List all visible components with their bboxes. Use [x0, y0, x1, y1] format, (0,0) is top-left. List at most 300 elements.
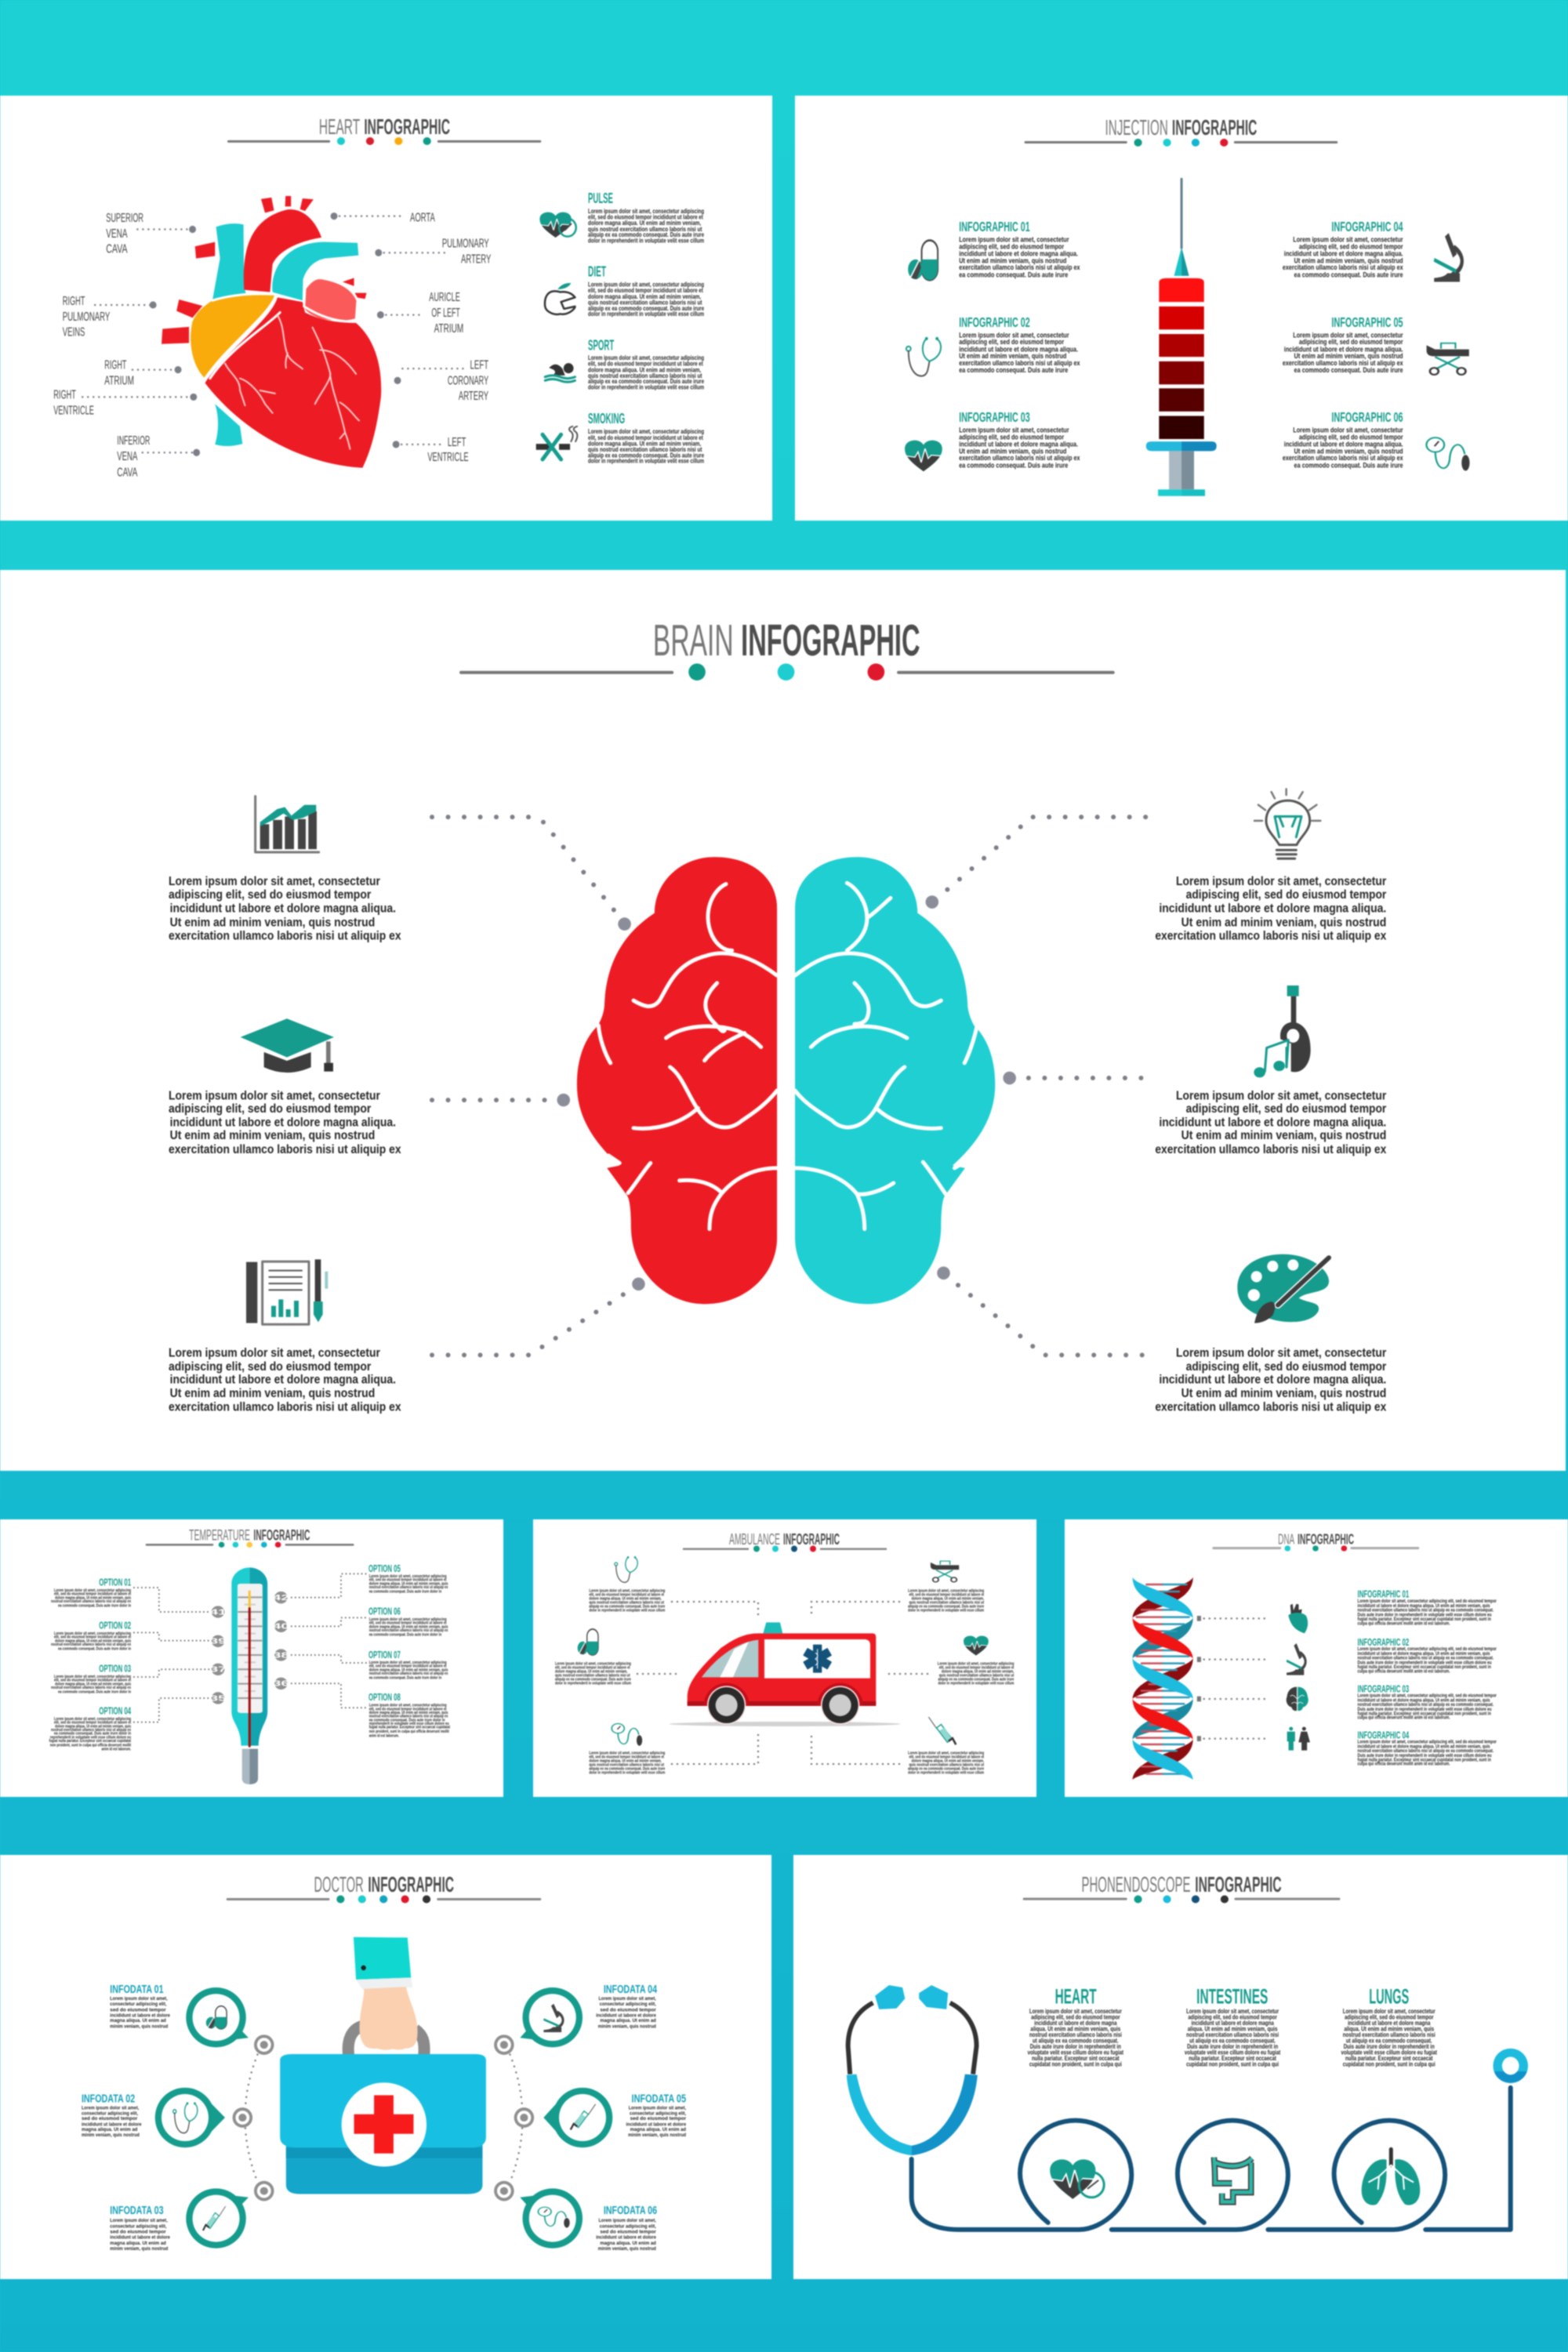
text: option 04	[49, 1706, 131, 1751]
text: infodata 05: sed do eiusmod tempor	[630, 2116, 686, 2122]
panel: temperature infographic: elit, sed do eiusmod tempor incididunt ut labore et	[54, 1592, 131, 1596]
panel: phonendoscope infographic: nostrud exercitation ullamco laboris nisi	[1029, 2032, 1122, 2038]
panel: phonendoscope infographic: adipiscing elit, sed do eiusmod tempor	[1345, 2014, 1434, 2020]
panel: temperature infographic: nostrud exercitation ullamco laboris nisi ut aliquip ex	[369, 1714, 448, 1719]
panel: heart infographic: ARTERY	[459, 389, 488, 403]
heart anatomy labels and leader lines: ATRIUM	[434, 321, 463, 336]
text: dna 01: INFOGRAPHIC 01	[1358, 1589, 1409, 1600]
text: infodata 06	[596, 2203, 657, 2252]
heart anatomy labels and leader lines: AURICLE	[429, 289, 460, 304]
panel: heart infographic: quis nostrud exercitation ullamco laboris nisi ut	[588, 372, 702, 379]
text: chart block: incididunt ut labore et dolore magna aliqua.	[170, 901, 396, 915]
text: infodata 01: magna aliqua. Ut enim ad	[110, 2018, 166, 2024]
panel: phonendoscope infographic: Duis aute irure dolor in reprehenderit in	[1030, 2044, 1121, 2050]
panel: phonendoscope infographic: nostrud exercitation ullamco laboris nisi	[1343, 2032, 1436, 2038]
panel: heart infographic: elit, sed do eiusmod tempor incididunt ut labore et	[588, 288, 703, 294]
icon: pills	[908, 241, 938, 280]
panel: temperature infographic: Lorem ipsum dolor sit amet, consectetur adipiscing	[54, 1716, 131, 1721]
panel: ambulance infographic: dolore magna aliqua. Ut enim ad minim veniam,	[555, 1668, 627, 1674]
brain: right teal hemisphere	[795, 857, 995, 1304]
text: heart column: HEART	[1055, 1984, 1097, 2009]
text: clipboard block	[169, 1345, 401, 1414]
icon: no smoking	[536, 426, 577, 459]
icon: apple	[545, 283, 575, 314]
panel: ambulance infographic: Lorem ipsum dolor sit amet, consectetur adipiscing	[908, 1750, 984, 1755]
panel: doctor infographic: INFODATA 04	[604, 1982, 657, 1996]
panel: phonendoscope infographic: nulla pariatur. Excepteur sint occaecat	[1345, 2056, 1433, 2062]
icon: thermometer	[571, 2104, 596, 2129]
panel: temperature infographic: elit, sed do eiusmod tempor incididunt ut labore et	[54, 1720, 131, 1725]
text: infodata 03: magna aliqua. Ut enim ad	[110, 2240, 166, 2246]
list: pulse	[588, 191, 704, 245]
panel: doctor infographic: minim veniam, quis nostrud	[598, 2245, 656, 2252]
list: sport: SPORT	[588, 337, 614, 354]
text: option 06: OPTION 06	[368, 1606, 401, 1617]
block: infographic 06	[1283, 410, 1403, 470]
panel: temperature infographic: dolore magna aliqua. Ut enim ad minim veniam, quis	[55, 1682, 131, 1686]
icon: gauge	[612, 1723, 642, 1746]
temperature markers: 38	[273, 1651, 290, 1660]
panel: ambulance infographic: Lorem ipsum dolor sit amet, consectetur adipiscing	[555, 1661, 631, 1666]
text: infodata 01	[110, 1982, 170, 2029]
panel: phonendoscope infographic: voluptate velit esse cillum dolore eu fugiat	[1028, 2049, 1123, 2056]
title: injection infographic	[1025, 116, 1337, 147]
text: clipboard block: exercitation ullamco laboris nisi ut aliquip ex	[169, 1399, 401, 1414]
panel: doctor infographic: INFODATA 01	[110, 1982, 164, 1996]
heart anatomy labels and leader lines	[53, 210, 491, 479]
panel: temperature infographic: nostrud exercitation ullamco laboris nisi ut aliquip ex	[369, 1584, 448, 1589]
icon: microscope	[543, 2005, 563, 2032]
panel: injection infographic: Lorem ipsum dolor sit amet, consectetur	[1293, 331, 1403, 339]
list: pulse: PULSE	[588, 191, 613, 206]
text: guitar block: incididunt ut labore et dolore magna aliqua.	[1159, 1115, 1386, 1129]
panel: ambulance infographic: elit, sed do eiusmod tempor incididunt ut labore et	[909, 1754, 984, 1759]
panel: phonendoscope infographic: nulla pariatur. Excepteur sint occaecat	[1032, 2056, 1120, 2062]
panel: doctor infographic: minim veniam, quis nostrud	[628, 2132, 686, 2138]
panel: injection infographic	[795, 96, 1568, 521]
block: infographic 01: adipiscing elit, sed do eiusmod tempor	[959, 242, 1064, 251]
panel: ambulance infographic: dolor in reprehenderit in voluptate velit esse cillum	[589, 1769, 665, 1775]
title: brain infographic: INFOGRAPHIC	[741, 615, 920, 665]
text: clipboard block: incididunt ut labore et dolore magna aliqua.	[170, 1372, 396, 1386]
panel: temperature infographic: nostrud exercitation ullamco laboris nisi ut aliquip ex	[51, 1599, 131, 1603]
icon: stretcher	[931, 1561, 959, 1582]
text: cap block: Lorem ipsum dolor sit amet, consectetur	[169, 1088, 380, 1102]
panel: ambulance infographic: elit, sed do eiusmod tempor incididunt ut labore et	[909, 1592, 984, 1597]
icon: clipboard report	[246, 1259, 328, 1324]
panel: heart infographic: quis nostrud exercitation ullamco laboris nisi ut	[588, 447, 702, 453]
text: dolor in reprehenderit in voluptate velit esse cillum	[938, 1680, 1014, 1686]
panel: doctor infographic: minim veniam, quis nostrud	[110, 2245, 168, 2252]
panel: ambulance infographic: Lorem ipsum dolor sit amet, consectetur adipiscing	[589, 1750, 665, 1755]
text: heart column	[1028, 1984, 1123, 2068]
panel: temperature infographic: nostrud exercitation ullamco laboris nisi ut aliquip ex	[369, 1628, 448, 1632]
text: dna 04	[1358, 1730, 1497, 1766]
text: chart block: adipiscing elit, sed do eiusmod tempor	[169, 887, 371, 902]
panel: doctor infographic: incididunt ut labore et dolore	[626, 2122, 686, 2127]
panel: heart infographic: aliquip ex ea commodo consequat. Duis aute irure	[588, 305, 704, 312]
text: palette block: incididunt ut labore et dolore magna aliqua.	[1159, 1372, 1386, 1386]
panel: doctor infographic: consectetur adipiscing elit,	[630, 2111, 686, 2117]
panel: temperature infographic: dolore magna aliqua. Ut enim ad minim veniam, quis	[369, 1581, 448, 1586]
heart anatomy labels and leader lines: AORTA	[410, 210, 435, 224]
panel: doctor infographic: INFODATA 03	[110, 2203, 164, 2217]
panel: injection infographic: incididunt ut labore et dolore magna aliqua.	[959, 345, 1078, 353]
title: heart infographic	[228, 115, 540, 145]
panel: heart infographic: dolore magna aliqua. Ut enim ad minim veniam,	[588, 220, 701, 227]
panel: phonendoscope infographic: ut aliquip ex ea commodo consequat.	[1189, 2038, 1276, 2044]
title: dna infographic: INFOGRAPHIC	[1298, 1531, 1354, 1548]
title: dna infographic	[1214, 1531, 1418, 1552]
text: option 07	[368, 1650, 448, 1680]
text: elit, sed do eiusmod tempor incididunt ut labore et	[939, 1664, 1014, 1670]
panel: brain infographic	[0, 570, 1566, 1471]
icon: syringe	[203, 2206, 226, 2230]
panel: injection infographic: Ut enim ad minim veniam, quis nostrud	[1294, 351, 1403, 360]
panel: phonendoscope infographic: cupidatat non proident, sunt in culpa qui	[1029, 2061, 1122, 2068]
block: infographic 01: INFOGRAPHIC 01	[959, 220, 1030, 235]
panel: heart infographic: dolore magna aliqua. Ut enim ad minim veniam,	[588, 367, 701, 373]
panel: injection infographic: INFOGRAPHIC 05	[1331, 315, 1403, 330]
panel: temperature infographic: ea commodo consequat. Duis aute irure dolor in	[54, 1731, 131, 1736]
dotted connectors	[637, 1602, 931, 1764]
panel: temperature infographic: elit, sed do eiusmod tempor incididunt ut labore et	[369, 1577, 447, 1582]
panel: injection infographic: adipiscing elit, sed do eiusmod tempor	[1299, 433, 1403, 441]
panel: doctor infographic: minim veniam, quis nostrud	[598, 2024, 656, 2029]
text: guitar block: adipiscing elit, sed do eiusmod tempor	[1186, 1101, 1386, 1115]
panel: doctor infographic: INFODATA 05	[632, 2092, 686, 2105]
text: option 01	[51, 1577, 131, 1608]
panel: temperature infographic: OPTION 01	[99, 1577, 131, 1588]
heart anatomy labels and leader lines: VENTRICLE	[427, 449, 469, 464]
panel: phonendoscope infographic: nulla pariatur. Excepteur sint occaecat	[1189, 2056, 1276, 2062]
panel: temperature infographic: elit, sed do eiusmod tempor incididunt ut labore et	[369, 1621, 447, 1625]
title: temperature infographic: TEMPERATURE	[189, 1526, 250, 1544]
panel: temperature infographic: ea commodo consequat. Duis aute irure dolor in	[369, 1675, 441, 1680]
panel: dna infographic	[1065, 1519, 1568, 1797]
panel: ambulance infographic: dolore magna aliqua. Ut enim ad minim veniam,	[912, 1595, 984, 1601]
text: option 07: OPTION 07	[368, 1650, 401, 1661]
text: aliquip ex ea commodo consequat. Duis aute irure	[938, 1676, 1014, 1682]
icon: pulse heart with clock	[539, 212, 576, 238]
text: ambulance block bottom left	[589, 1750, 665, 1775]
text: infodata 05	[626, 2092, 686, 2138]
icon: graduation cap	[241, 1018, 334, 1073]
panel: temperature infographic: non proident, sunt in culpa qui officia deserunt mollit	[369, 1729, 449, 1733]
panel: doctor infographic: magna aliqua. Ut enim ad	[630, 2127, 686, 2132]
text: palette block: Ut enim ad minim veniam, quis nostrud	[1181, 1385, 1386, 1400]
text: palette block: adipiscing elit, sed do eiusmod tempor	[1186, 1359, 1386, 1374]
panel: temperature infographic: elit, sed do eiusmod tempor incididunt ut labore et	[54, 1678, 131, 1682]
text: Lorem ipsum dolor sit amet, consectetur adipiscing	[938, 1661, 1014, 1666]
panel: heart infographic: aliquip ex ea commodo consequat. Duis aute irure	[588, 379, 704, 385]
text: cap block: adipiscing elit, sed do eiusmod tempor	[169, 1101, 371, 1115]
icon: stethoscope	[173, 2102, 198, 2133]
text: cap block: exercitation ullamco laboris nisi ut aliquip ex	[169, 1142, 401, 1156]
temperature markers: 35	[209, 1694, 227, 1703]
text: guitar block	[1155, 1088, 1387, 1156]
panel: heart infographic: CORONARY	[448, 373, 488, 387]
panel: ambulance infographic: dolore magna aliqua. Ut enim ad minim veniam,	[589, 1758, 662, 1763]
text: guitar block: Lorem ipsum dolor sit amet, consectetur	[1176, 1088, 1386, 1102]
icon: pills	[206, 2006, 227, 2029]
panel: ambulance infographic: elit, sed do eiusmod tempor incididunt ut labore et	[589, 1592, 664, 1597]
text: ambulance block top right	[908, 1588, 984, 1613]
heart anatomy labels and leader lines: RIGHT	[53, 387, 76, 401]
panel: heart infographic: elit, sed do eiusmod tempor incididunt ut labore et	[588, 214, 703, 221]
title: doctor infographic	[227, 1872, 540, 1903]
panel: doctor infographic: magna aliqua. Ut enim ad	[600, 2240, 656, 2246]
block: infographic 01: Ut enim ad minim veniam, quis nostrud	[959, 256, 1066, 265]
block: infographic 02	[959, 315, 1080, 374]
temperature markers: 39	[209, 1637, 227, 1646]
icon: gauge	[538, 2207, 570, 2228]
text: chart block: exercitation ullamco laboris nisi ut aliquip ex	[169, 928, 401, 942]
connector nodes	[233, 2034, 534, 2201]
panel: heart infographic: Lorem ipsum dolor sit amet, consectetur adipiscing	[588, 281, 704, 289]
panel: heart infographic: quis nostrud exercitation ullamco laboris nisi ut	[588, 226, 702, 233]
panel: phonendoscope infographic: Duis aute irure dolor in reprehenderit in	[1344, 2044, 1435, 2050]
icon: lungs	[1362, 2149, 1420, 2205]
panel: ambulance infographic: quis nostrud exercitation ullamco laboris nisi ut	[939, 1672, 1014, 1678]
title: injection infographic: INFOGRAPHIC	[1172, 116, 1257, 140]
text: infodata 03: sed do eiusmod tempor	[110, 2229, 166, 2235]
text: bulb block: adipiscing elit, sed do eiusmod tempor	[1186, 887, 1386, 902]
panel: temperature infographic: ea commodo consequat. Duis aute irure dolor in	[369, 1589, 441, 1594]
text: bulb block: Ut enim ad minim veniam, quis nostrud	[1181, 915, 1386, 929]
text: chart block	[169, 874, 401, 942]
ambulance vehicle	[670, 1622, 900, 1726]
title: brain infographic	[461, 615, 1113, 681]
panel: phonendoscope infographic: Lorem ipsum dolor sit amet, consectetur	[1186, 2009, 1279, 2015]
text: option 05: OPTION 05	[368, 1563, 401, 1574]
panel: temperature infographic: dolore magna aliqua. Ut enim ad minim veniam, quis	[369, 1668, 448, 1672]
icon: swimmer	[545, 363, 575, 382]
dna double helix	[1133, 1577, 1193, 1780]
panel: phonendoscope infographic: voluptate velit esse cillum dolore eu fugiat	[1341, 2049, 1437, 2056]
panel: doctor infographic: incididunt ut labore et dolore	[596, 2234, 656, 2241]
heart anatomy labels and leader lines: SUPERIOR	[106, 210, 143, 225]
panel: temperature infographic: dolore magna aliqua. Ut enim ad minim veniam, quis	[55, 1639, 131, 1643]
panel: temperature infographic: dolore magna aliqua. Ut enim ad minim veniam, quis	[55, 1724, 131, 1729]
panel: temperature infographic: INFOGRAPHIC	[253, 1526, 310, 1544]
text: dolore magna aliqua. Ut enim ad minim veniam,	[942, 1668, 1014, 1674]
panel: doctor infographic: Lorem ipsum dolor sit amet,	[110, 2218, 168, 2223]
icon: bar chart	[256, 797, 319, 852]
text: palette block: exercitation ullamco laboris nisi ut aliquip ex	[1155, 1399, 1387, 1414]
block: infographic 02: Ut enim ad minim veniam, quis nostrud	[959, 351, 1066, 360]
panel: doctor infographic	[0, 1855, 771, 2279]
text: ambulance block middle right	[938, 1661, 1014, 1686]
panel: temperature infographic: dolore magna aliqua. Ut enim ad minim veniam, quis	[369, 1710, 448, 1715]
text: palette block	[1155, 1345, 1387, 1414]
panel: ambulance infographic: dolor in reprehenderit in voluptate velit esse cillum	[908, 1607, 984, 1613]
block: infographic 03: adipiscing elit, sed do eiusmod tempor	[959, 433, 1064, 441]
panel: ambulance infographic: aliquip ex ea commodo consequat. Duis aute irure	[589, 1766, 665, 1771]
block: infographic 04	[1283, 220, 1403, 279]
panel: injection infographic: exercitation ullamco laboris nisi ut aliquip ex	[959, 453, 1080, 462]
panel: heart infographic: dolor in reprehenderit in voluptate velit esse cillum	[588, 384, 704, 391]
syringe	[1146, 179, 1217, 496]
block: infographic 01: Lorem ipsum dolor sit amet, consectetur	[959, 235, 1069, 244]
panel: injection infographic: ea commodo consequat. Duis aute irure	[1294, 270, 1403, 279]
panel: temperature infographic: OPTION 03	[99, 1663, 131, 1675]
panel: doctor infographic: minim veniam, quis nostrud	[110, 2024, 168, 2029]
heart anatomy labels and leader lines: OF LEFT	[431, 306, 460, 320]
list: sport	[588, 337, 704, 391]
panel: doctor infographic: consectetur adipiscing elit,	[600, 2002, 656, 2007]
dotted connectors	[1197, 1616, 1266, 1741]
text: palette block: Lorem ipsum dolor sit amet, consectetur	[1176, 1345, 1386, 1359]
panel: heart infographic: PULMONARY	[442, 236, 489, 250]
text: cap block	[169, 1088, 401, 1156]
title: temperature infographic	[147, 1526, 353, 1548]
text: chart block: Ut enim ad minim veniam, quis nostrud	[170, 915, 375, 929]
panel: heart infographic: elit, sed do eiusmod tempor incididunt ut labore et	[588, 434, 703, 441]
icon: microscope	[1287, 1644, 1305, 1675]
medical case held by hand	[280, 1937, 486, 2194]
panel: injection infographic: incididunt ut labore et dolore magna aliqua.	[959, 440, 1078, 448]
block: infographic 01: ea commodo consequat. Duis aute irure	[959, 270, 1068, 279]
panel: phonendoscope infographic	[793, 1855, 1568, 2279]
panel: phonendoscope infographic: cupidatat non proident, sunt in culpa qui	[1186, 2061, 1279, 2068]
heart anatomy labels and leader lines: VENA	[117, 449, 138, 463]
panel: ambulance infographic: dolore magna aliqua. Ut enim ad minim veniam,	[589, 1595, 662, 1601]
panel: heart infographic: aliquip ex ea commodo consequat. Duis aute irure	[588, 452, 704, 459]
panel: injection infographic: exercitation ullamco laboris nisi ut aliquip ex	[959, 358, 1080, 367]
text: dna 04: INFOGRAPHIC 04	[1358, 1730, 1409, 1741]
icon: heart pulse	[964, 1635, 989, 1656]
panel: injection infographic: incididunt ut labore et dolore magna aliqua.	[959, 249, 1078, 258]
heart anatomy labels and leader lines: RIGHT	[104, 358, 126, 372]
block: infographic 03: Ut enim ad minim veniam, quis nostrud	[959, 447, 1066, 456]
icon: heart pulse	[905, 441, 942, 471]
heart anatomy labels and leader lines: CAVA	[106, 241, 128, 256]
icon: brain	[1287, 1687, 1308, 1711]
panel: ambulance infographic: quis nostrud exercitation ullamco laboris nisi ut	[589, 1762, 664, 1767]
panel: temperature infographic: elit, sed do eiusmod tempor incididunt ut labore et	[369, 1707, 447, 1711]
text: infodata 04	[596, 1982, 657, 2029]
panel: heart infographic: dolor in reprehenderit in voluptate velit esse cillum	[588, 311, 704, 318]
text: bulb block: incididunt ut labore et dolore magna aliqua.	[1159, 901, 1386, 915]
panel: temperature infographic: elit, sed do eiusmod tempor incididunt ut labore et	[54, 1635, 131, 1639]
block: infographic 02: adipiscing elit, sed do eiusmod tempor	[959, 337, 1064, 346]
list: diet: DIET	[588, 264, 606, 280]
panel: phonendoscope infographic: voluptate velit esse cillum dolore eu fugiat	[1185, 2049, 1280, 2056]
title: phonendoscope infographic	[1024, 1872, 1339, 1903]
icon: intestines	[1214, 2158, 1252, 2202]
title: brain infographic: BRAIN	[653, 615, 734, 665]
panel: doctor infographic: INFODATA 06	[604, 2203, 657, 2217]
panel: temperature infographic: dolore magna aliqua. Ut enim ad minim veniam, quis	[369, 1624, 448, 1629]
panel: ambulance infographic: aliquip ex ea commodo consequat. Duis aute irure	[555, 1676, 631, 1682]
panel: ambulance infographic: quis nostrud exercitation ullamco laboris nisi ut	[555, 1672, 630, 1678]
panel: temperature infographic	[0, 1519, 503, 1797]
panel: temperature infographic: non proident, sunt in culpa qui officia deserunt mollit	[50, 1743, 131, 1748]
thermometer	[231, 1567, 267, 1784]
panel: temperature infographic: Lorem ipsum dolor sit amet, consectetur adipiscing	[369, 1703, 447, 1708]
panel: phonendoscope infographic: nostrud exercitation ullamco laboris nisi	[1186, 2032, 1279, 2038]
temperature markers	[209, 1592, 290, 1704]
text: infodata 06: sed do eiusmod tempor	[600, 2229, 656, 2235]
icon: blood pressure gauge	[1426, 437, 1469, 470]
panel: doctor infographic: magna aliqua. Ut enim ad	[600, 2018, 656, 2024]
panel: heart infographic: dolore magna aliqua. Ut enim ad minim veniam,	[588, 441, 701, 448]
title: phonendoscope infographic: PHONENDOSCOPE	[1081, 1872, 1191, 1896]
panel: phonendoscope infographic: cupidatat non proident, sunt in culpa qui	[1343, 2061, 1436, 2068]
title: doctor infographic: INFOGRAPHIC	[368, 1872, 454, 1896]
panel: temperature infographic: reprehenderit in voluptate velit esse cillum dolore eu	[369, 1721, 449, 1726]
text: intestines column	[1185, 1984, 1280, 2068]
text: cap block: Ut enim ad minim veniam, quis nostrud	[170, 1127, 375, 1142]
panel: temperature infographic: Lorem ipsum dolor sit amet, consectetur adipiscing	[54, 1674, 131, 1679]
panel: phonendoscope infographic: aliqua. Ut enim ad minim veniam, quis	[1188, 2026, 1278, 2032]
icon: stethoscope	[615, 1556, 637, 1582]
icon: heart with gauge	[1050, 2159, 1104, 2199]
panel: temperature infographic: fugiat nulla pariatur. Excepteur sint occaecat cupidatat	[369, 1725, 450, 1730]
block: infographic 05	[1283, 315, 1403, 374]
panel: phonendoscope infographic: Lorem ipsum dolor sit amet, consectetur	[1343, 2009, 1436, 2015]
text: clipboard block: Lorem ipsum dolor sit amet, consectetur	[169, 1345, 380, 1359]
panel: heart infographic: quis nostrud exercitation ullamco laboris nisi ut	[588, 299, 702, 307]
title: ambulance infographic: INFOGRAPHIC	[783, 1531, 840, 1548]
panel: temperature infographic: Lorem ipsum dolor sit amet, consectetur adipiscing	[369, 1660, 447, 1664]
text: clipboard block: adipiscing elit, sed do eiusmod tempor	[169, 1359, 371, 1374]
dotted connectors	[432, 817, 1145, 1355]
text: ambulance block bottom right	[908, 1750, 984, 1775]
heart anatomy labels and leader lines: ATRIUM	[104, 373, 134, 387]
text: option 08: OPTION 08	[368, 1692, 401, 1703]
text: option 05	[368, 1563, 448, 1594]
text: infodata 02: sed do eiusmod tempor	[82, 2116, 138, 2122]
panel: ambulance infographic: Lorem ipsum dolor sit amet, consectetur adipiscing	[908, 1588, 984, 1593]
panel: phonendoscope infographic: adipiscing elit, sed do eiusmod tempor	[1031, 2014, 1120, 2020]
panel: injection infographic: Lorem ipsum dolor sit amet, consectetur	[1293, 235, 1403, 244]
panel: injection infographic: exercitation ullamco laboris nisi ut aliquip ex	[1283, 263, 1403, 271]
panel: phonendoscope infographic: ut aliquip ex ea commodo consequat.	[1346, 2038, 1432, 2044]
panel: temperature infographic: ea commodo consequat. Duis aute irure dolor in	[58, 1646, 131, 1651]
panel: temperature infographic: ea commodo consequat. Duis aute irure dolor in	[369, 1718, 445, 1722]
panel: ambulance infographic: dolor in reprehenderit in voluptate velit esse cillum	[589, 1607, 665, 1613]
panel: injection infographic: exercitation ullamco laboris nisi ut aliquip ex	[1283, 358, 1403, 367]
panel: phonendoscope infographic: aliqua. Ut enim ad minim veniam, quis	[1030, 2026, 1120, 2032]
icon: people	[1287, 1727, 1310, 1751]
panel: phonendoscope infographic: aliqua. Ut enim ad minim veniam, quis	[1344, 2026, 1434, 2032]
icon: paint palette	[1237, 1254, 1329, 1323]
block: infographic 02: ea commodo consequat. Duis aute irure	[959, 365, 1068, 374]
text: option 02	[51, 1620, 131, 1651]
panel: heart infographic: elit, sed do eiusmod tempor incididunt ut labore et	[588, 361, 703, 368]
teal bubbles	[155, 1987, 612, 2249]
panel: temperature infographic: dolore magna aliqua. Ut enim ad minim veniam, quis	[55, 1595, 131, 1600]
panel: ambulance infographic: aliquip ex ea commodo consequat. Duis aute irure	[908, 1766, 984, 1771]
temperature markers: 41	[209, 1608, 227, 1617]
panel: doctor infographic: incididunt ut labore et dolore	[110, 2013, 170, 2019]
text: infodata 02: magna aliqua. Ut enim ad	[82, 2127, 137, 2132]
temperature markers: 37	[209, 1665, 227, 1674]
panel: temperature infographic: nostrud exercitation ullamco laboris nisi ut aliquip ex	[51, 1685, 131, 1690]
block: infographic 03: ea commodo consequat. Duis aute irure	[959, 461, 1068, 470]
text: ambulance block middle left	[555, 1661, 631, 1686]
panel: ambulance infographic: aliquip ex ea commodo consequat. Duis aute irure	[908, 1603, 984, 1609]
text: infodata 04: sed do eiusmod tempor	[600, 2007, 656, 2013]
text: option 08: anim id est laborum.	[369, 1733, 399, 1738]
block: infographic 03: INFOGRAPHIC 03	[959, 410, 1030, 426]
panel: ambulance infographic: dolor in reprehenderit in voluptate velit esse cillum	[555, 1680, 631, 1686]
text: infodata 03	[110, 2203, 170, 2252]
panel: ambulance infographic: elit, sed do eiusmod tempor incididunt ut labore et	[589, 1754, 664, 1759]
dotted connectors	[134, 1573, 366, 1722]
